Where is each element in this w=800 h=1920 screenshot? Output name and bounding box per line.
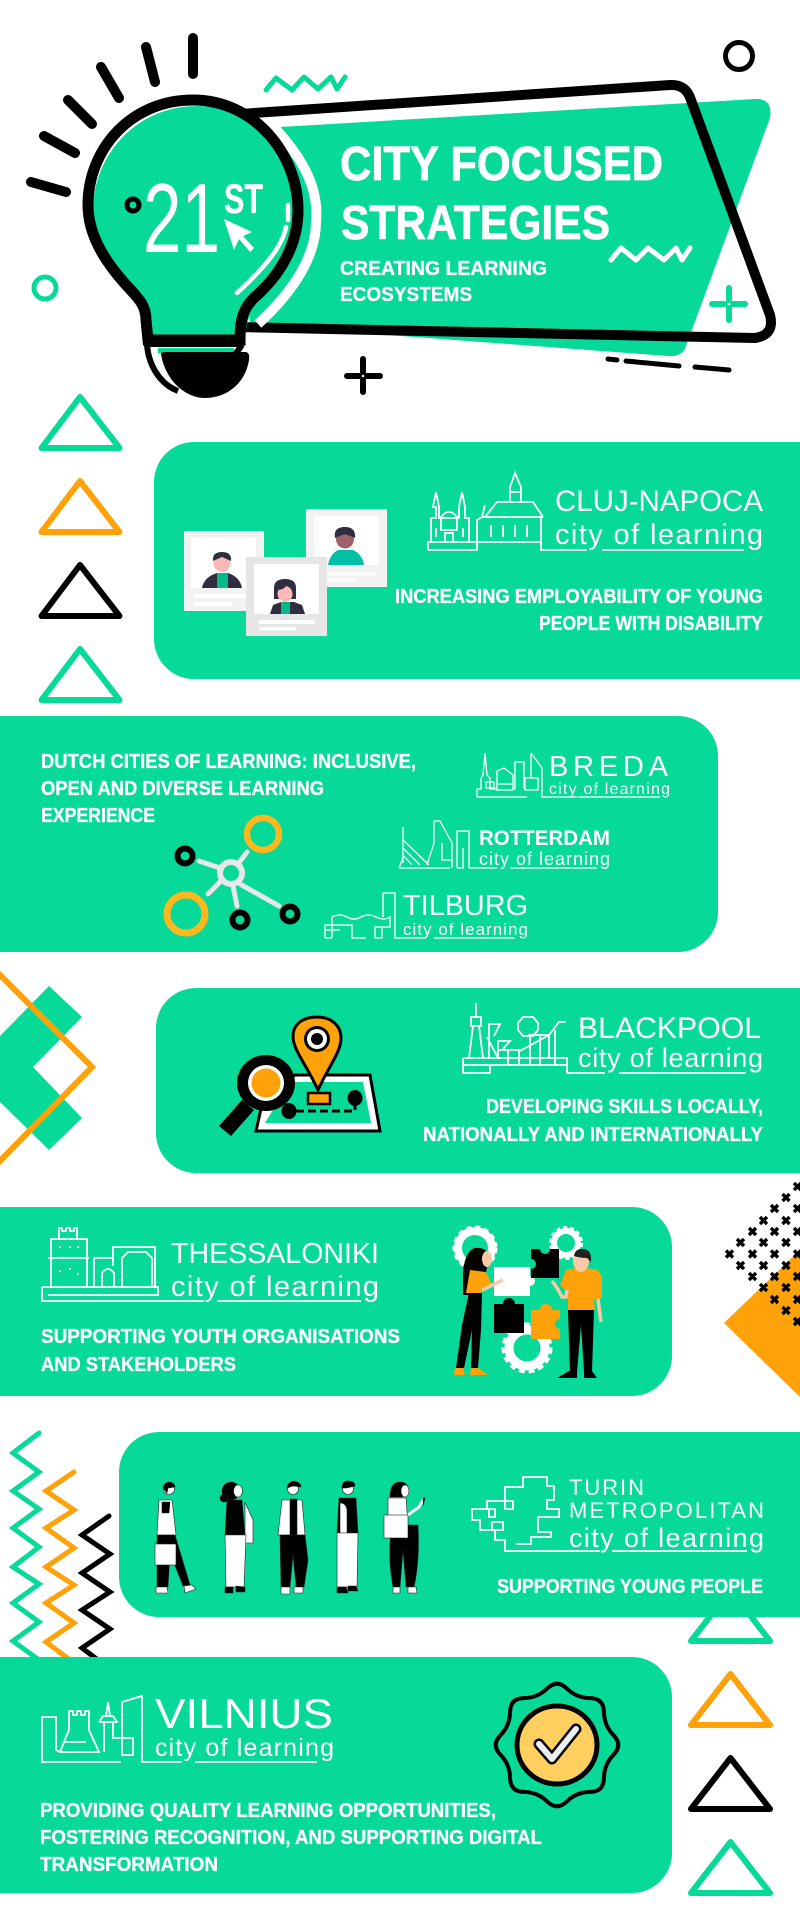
panel: Dutch cities — [0, 716, 718, 952]
heading: Thessaloniki: THESSALONIKI — [171, 1238, 379, 1270]
panel: Cluj-Napoca — [154, 442, 800, 679]
decoration: right triangles — [691, 1590, 770, 1893]
banner black frame — [225, 85, 771, 338]
description: Dutch cities — [41, 751, 416, 827]
description: Thessaloniki — [41, 1326, 400, 1376]
description: Vilnius: FOSTERING RECOGNITION, AND SUPPORTING DIGITAL — [40, 1827, 542, 1849]
title: CITY FOCUSED — [340, 138, 663, 191]
heading: Blackpool: city of learning — [578, 1043, 763, 1073]
decorative zigzags — [266, 77, 690, 260]
decoration: orange diamond with crosses — [724, 1183, 800, 1397]
description: Cluj-Napoca: PEOPLE WITH DISABILITY — [539, 613, 764, 635]
heading: Blackpool — [578, 1012, 763, 1073]
illustration: map with pin and magnifier — [219, 1017, 380, 1136]
heading: Cluj-Napoca: CLUJ-NAPOCA — [555, 485, 763, 518]
person three — [278, 1481, 308, 1594]
heading: Cluj-Napoca — [555, 485, 763, 551]
subtitle: CREATING LEARNING — [340, 258, 547, 280]
heading: Tilburg: city of learning — [403, 920, 528, 939]
illustration: network — [167, 818, 298, 933]
title — [340, 138, 663, 250]
illustration: profile cards — [184, 509, 387, 636]
heading: Breda — [549, 751, 670, 798]
illustration: people in a queue — [155, 1481, 425, 1594]
heading: Thessaloniki — [171, 1238, 379, 1303]
person one — [155, 1482, 196, 1593]
panel: Thessaloniki — [0, 1207, 672, 1396]
city skyline: Tilburg — [325, 893, 515, 938]
heading: Tilburg — [403, 890, 528, 939]
decoration: left triangles — [42, 397, 120, 700]
description: Vilnius — [40, 1800, 542, 1876]
description: Dutch cities: EXPERIENCE — [41, 805, 155, 827]
hero: light bulb banner — [31, 38, 771, 398]
panel: Vilnius — [0, 1657, 672, 1893]
description: Blackpool: DEVELOPING SKILLS LOCALLY, — [486, 1096, 763, 1118]
heading: Turin Metropolitan: city of learning — [569, 1523, 764, 1553]
banner green shape — [250, 99, 770, 356]
logo: 21st: ST — [224, 175, 263, 222]
white crescent beside bulb — [258, 125, 316, 324]
heading: Vilnius: city of learning — [155, 1734, 334, 1762]
heading: Rotterdam: ROTTERDAM — [479, 827, 610, 850]
heading: Cluj-Napoca: city of learning — [555, 519, 763, 551]
description: Turin Metropolitan: SUPPORTING YOUNG PEOPLE — [497, 1576, 763, 1598]
subtitle: ECOSYSTEMS — [340, 284, 472, 306]
small ring in bulb — [127, 199, 139, 211]
decorative plus marks — [347, 288, 745, 392]
bulb rays — [31, 38, 193, 192]
description: Thessaloniki: SUPPORTING YOUTH ORGANISATIONS — [41, 1326, 400, 1348]
title: STRATEGIES — [341, 197, 610, 250]
heading: Thessaloniki: city of learning — [171, 1271, 379, 1303]
heading: Turin Metropolitan — [569, 1475, 764, 1553]
city skyline: Cluj-Napoca — [428, 473, 744, 550]
city skyline: Blackpool — [463, 1003, 746, 1073]
decorative rings — [34, 42, 752, 299]
decorative dashes — [608, 359, 729, 370]
description: Cluj-Napoca: INCREASING EMPLOYABILITY OF YOUNG — [395, 586, 763, 608]
person five — [384, 1482, 425, 1593]
decoration: left zigzag lines — [13, 1433, 110, 1660]
heading: Blackpool: BLACKPOOL — [578, 1012, 761, 1045]
subtitle — [340, 258, 547, 306]
description: Dutch cities: DUTCH CITIES OF LEARNING: INCLUSIVE, — [41, 751, 416, 773]
heading: Breda: BREDA — [549, 751, 669, 783]
city skyline: Breda — [477, 753, 660, 797]
logo: 21st: 21 — [143, 163, 220, 273]
icon: quality badge — [496, 1684, 618, 1806]
panel: Blackpool — [156, 988, 800, 1173]
person two — [220, 1482, 253, 1593]
heading: Rotterdam: city of learning — [479, 849, 610, 869]
description: Blackpool: NATIONALLY AND INTERNATIONALLY — [423, 1124, 764, 1146]
description: Vilnius: PROVIDING QUALITY LEARNING OPPORTUNITIES, — [40, 1800, 496, 1822]
heading: Breda: city of learning — [549, 781, 670, 798]
panel: Turin Metropolitan — [119, 1432, 800, 1617]
city skyline: Rotterdam — [399, 821, 597, 868]
heading: Vilnius: VILNIUS — [155, 1690, 333, 1737]
decoration: teal and orange chevrons — [0, 973, 92, 1163]
heading: Vilnius — [155, 1690, 334, 1762]
city map outline: Turin — [472, 1477, 747, 1551]
heading: Turin Metropolitan: TURIN — [569, 1475, 644, 1500]
person four — [337, 1481, 358, 1593]
city skyline: Vilnius — [42, 1696, 317, 1762]
description: Blackpool — [423, 1096, 764, 1146]
illustration: puzzle team — [454, 1227, 602, 1378]
description: Thessaloniki: AND STAKEHOLDERS — [41, 1354, 236, 1376]
heading: Tilburg: TILBURG — [403, 890, 528, 922]
description: Vilnius: TRANSFORMATION — [40, 1854, 218, 1876]
city skyline: Thessaloniki — [42, 1228, 361, 1301]
heading: Rotterdam — [479, 827, 610, 869]
heading: Turin Metropolitan: METROPOLITAN — [569, 1498, 764, 1523]
description: Cluj-Napoca — [395, 586, 764, 635]
light bulb — [88, 100, 303, 398]
description: Dutch cities: OPEN AND DIVERSE LEARNING — [41, 778, 324, 800]
